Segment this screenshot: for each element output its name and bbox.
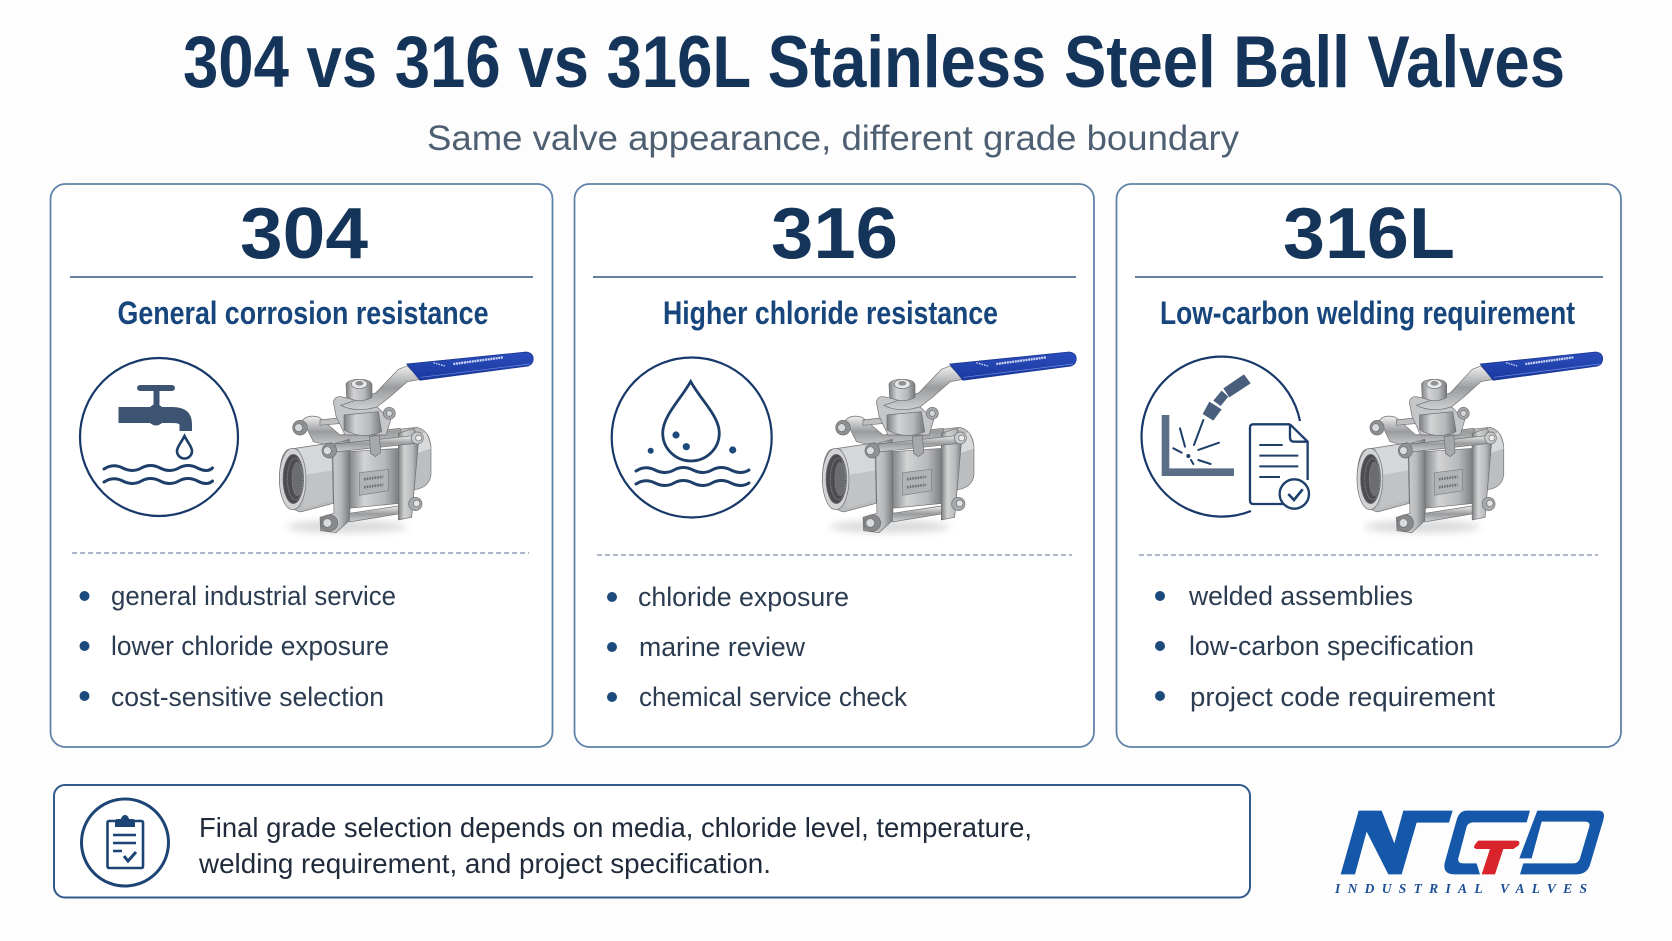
icon: faucet and water — [80, 358, 238, 516]
heading: low-carbon welding requirement: Low-carbon welding requirement — [1160, 295, 1575, 331]
panel: 316L — [1116, 184, 1621, 747]
bullet list: lower chloride exposure — [111, 631, 389, 661]
bullet list: cost-sensitive selection — [111, 682, 384, 712]
bullet list: chloride exposure — [638, 582, 849, 612]
bullet list: welded assemblies — [1188, 581, 1413, 611]
bullet list — [1155, 581, 1495, 712]
grade number: 316L: 316L — [1283, 194, 1455, 274]
callout: final grade selection note — [54, 785, 1250, 898]
icon: welding torch and document — [1142, 357, 1309, 517]
bullet list: project code requirement — [1190, 682, 1495, 712]
valve photo — [822, 352, 1076, 533]
bullet list: chemical service check — [639, 682, 907, 712]
grade number: 304: 304 — [240, 194, 368, 274]
icon: clipboard checklist — [82, 799, 168, 886]
grade number: 316: 316 — [771, 194, 898, 274]
panel: 316 — [574, 184, 1094, 747]
bullet list: low-carbon specification — [1189, 631, 1474, 661]
bullet list — [80, 581, 396, 712]
callout: final grade selection note: welding requirement, and project specification. — [198, 848, 771, 879]
heading: higher chloride resistance: Higher chloride resistance — [663, 295, 998, 331]
logo: NTGD Industrial Valves: INDUSTRIAL VALVES — [1334, 881, 1587, 896]
subtitle: Same valve appearance, different grade boundary — [427, 119, 1240, 158]
note text: Final grade selection depends on media, chloride level, temperature, — [199, 812, 1032, 843]
valve photo — [279, 352, 533, 533]
valve photo — [1357, 352, 1603, 533]
logo: NTGD Industrial Valves — [1334, 811, 1604, 896]
panel: 304 — [50, 184, 552, 747]
bullet list: general industrial service — [111, 581, 396, 611]
heading: general corrosion resistance: General corrosion resistance — [118, 295, 488, 331]
icon: chloride drop and water — [612, 358, 772, 518]
bullet list: marine review — [639, 632, 805, 662]
bullet list — [607, 582, 907, 712]
